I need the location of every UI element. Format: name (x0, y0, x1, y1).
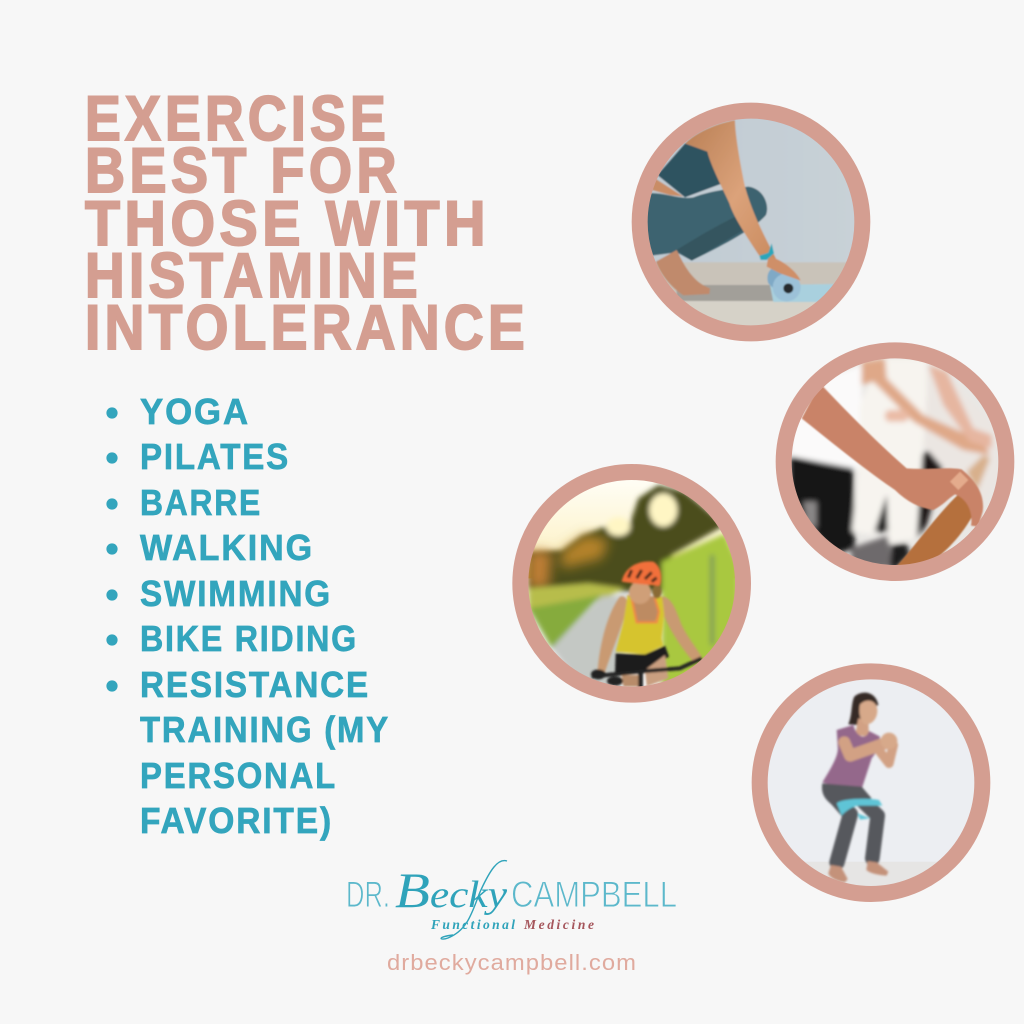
exercise bullet list (106, 391, 390, 841)
photo circle: barre (784, 350, 1006, 573)
leggings (643, 187, 767, 261)
barre rail (896, 494, 972, 568)
title: INTOLERANCE (85, 293, 529, 363)
bullet: resistance training: FAVORITE) (140, 800, 333, 841)
title: EXERCISE (85, 84, 390, 154)
bullet: yoga: YOGA (140, 391, 250, 432)
top (657, 143, 721, 197)
hair (848, 693, 878, 725)
central dancer (852, 358, 927, 543)
logo swoosh (441, 861, 507, 939)
face (629, 581, 651, 604)
field right (662, 533, 738, 688)
neck (855, 718, 869, 737)
resistance band (837, 799, 882, 816)
bullet: resistance training: RESISTANCE (140, 664, 370, 705)
bullet: barre: BARRE (140, 482, 262, 523)
shorts (615, 646, 669, 673)
midriff (652, 178, 683, 197)
logo: Dr. Becky Campbell Functional Medicine: Functional (430, 917, 515, 932)
bracelet (759, 243, 774, 260)
mat roll (766, 268, 782, 288)
tree line (528, 485, 725, 592)
foot (656, 250, 710, 295)
arms (844, 742, 893, 763)
logo: Dr. Becky Campbell Functional Medicine: Medicine (523, 917, 594, 932)
logo: Dr. Becky Campbell Functional Medicine: Becky (395, 862, 507, 918)
bullet: swimming: SWIMMING (140, 573, 332, 614)
arm and hand (802, 383, 983, 527)
shoulder and arm (685, 120, 777, 260)
logo: Dr. Becky Campbell Functional Medicine (346, 861, 677, 939)
bike handlebar (592, 658, 702, 677)
post (711, 555, 714, 645)
white shirt (790, 365, 862, 472)
black trousers (790, 457, 855, 555)
logo: Dr. Becky Campbell Functional Medicine: DR. (346, 874, 390, 915)
road (552, 595, 627, 688)
bullet: resistance training: TRAINING (MY (140, 709, 390, 750)
background dancer (926, 446, 950, 469)
chest (627, 595, 663, 625)
title: BEST FOR (85, 136, 401, 206)
bullet: walking: WALKING (140, 527, 314, 568)
helmet (622, 561, 661, 586)
arms (598, 596, 628, 672)
photo circle: yoga mat (640, 111, 863, 333)
field left (528, 583, 625, 612)
hand (767, 256, 801, 281)
tank top (616, 595, 664, 654)
feet (828, 865, 848, 882)
bullet: resistance training: PERSONAL (140, 755, 337, 796)
bullet: bike riding: BIKE RIDING (140, 618, 358, 659)
website url: drbeckycampbell.com (387, 950, 637, 975)
photo circle: resistance band squat (760, 671, 982, 894)
photo circle: bike riding (520, 472, 743, 695)
bullet: resistance training (106, 664, 390, 841)
logo: Dr. Becky Campbell Functional Medicine: CAMPBELL (511, 874, 677, 915)
shirt (822, 725, 880, 789)
bullet: pilates: PILATES (140, 436, 290, 477)
leggings (831, 792, 878, 862)
title (85, 84, 529, 363)
title: HISTAMINE (85, 241, 422, 311)
face (859, 701, 877, 724)
title: THOSE WITH (85, 189, 490, 259)
